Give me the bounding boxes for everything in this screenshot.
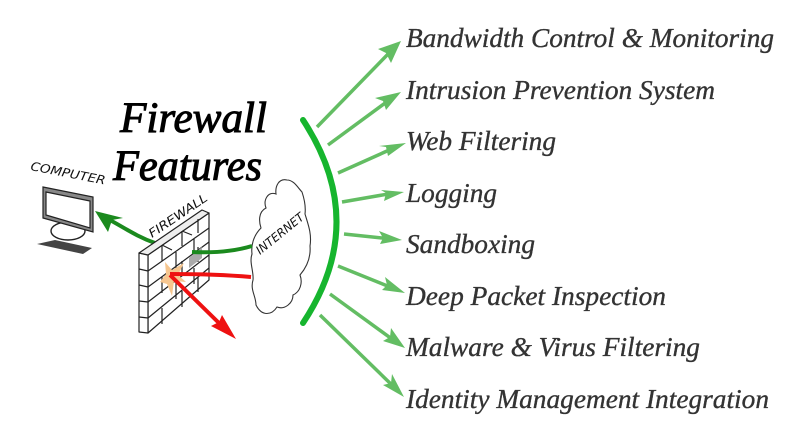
feature labels [405, 23, 774, 414]
title: Features [112, 143, 262, 190]
title [112, 95, 267, 190]
feature labels: Deep Packet Inspection [405, 281, 666, 311]
arrow: firewall to computer [95, 211, 155, 243]
feature labels: Identity Management Integration [405, 384, 769, 414]
firewall label: FIREWALL [146, 191, 210, 240]
computer label: COMPUTER [29, 159, 107, 187]
firewall hole [189, 247, 202, 268]
internet label: INTERNET [253, 209, 308, 257]
cloud: internet [251, 180, 311, 314]
feature labels: Malware & Virus Filtering [405, 332, 700, 362]
icon: computer [29, 159, 107, 254]
firewall wall [139, 210, 209, 333]
feature labels: Logging [405, 178, 497, 208]
impact star [160, 262, 186, 296]
arrow: blocked red [170, 274, 251, 339]
feature labels: Intrusion Prevention System [405, 75, 715, 105]
arc: shield [303, 120, 336, 323]
feature labels: Web Filtering [406, 126, 556, 156]
feature labels: Sandboxing [406, 229, 535, 259]
arrows: features [317, 41, 406, 397]
arrow: internet through firewall [192, 246, 252, 252]
title: Firewall [119, 95, 267, 142]
monitor [43, 187, 93, 240]
feature labels: Bandwidth Control & Monitoring [406, 23, 774, 53]
keyboard [37, 240, 92, 254]
